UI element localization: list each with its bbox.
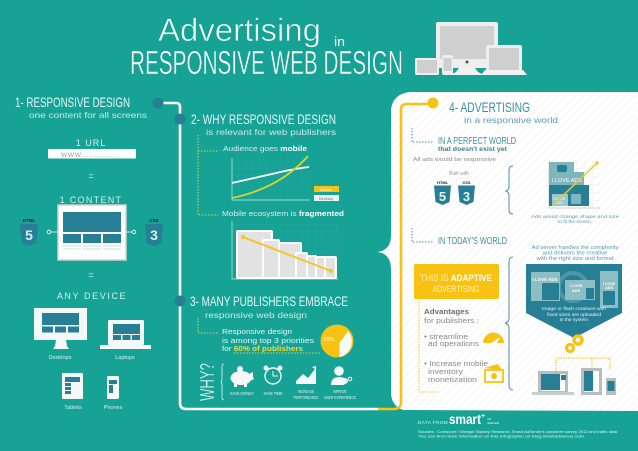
subsection: in a perfect world — [412, 128, 516, 177]
icon: HTML5 badge small — [434, 180, 451, 205]
brace large — [505, 257, 513, 390]
title — [130, 12, 403, 81]
heading 4: 4- ADVERTISING — [449, 99, 530, 115]
heading 3 — [190, 293, 348, 320]
1 URL box: WWW............... — [61, 152, 121, 159]
footer: sources: DATA FROM — [418, 420, 448, 425]
icon: HTML5 badge: HTML — [23, 218, 35, 223]
responsive ad illustration: Ads would change shape and size — [531, 214, 619, 220]
icon: improve user experience — [324, 366, 356, 400]
icon: HTML5 badge small: HTML — [437, 180, 449, 185]
heading 2: 2- WHY RESPONSIVE DESIGN — [191, 111, 336, 127]
icon: HTML5 badge — [20, 218, 38, 246]
1 URL box — [48, 138, 136, 181]
heading 2: is relevant for web publishers — [206, 127, 336, 137]
icon: phone ad layout — [606, 378, 616, 395]
heading 4 — [449, 99, 558, 125]
icon: CSS3 badge small — [458, 180, 475, 205]
subsection: in a perfect world: Built with — [449, 171, 469, 177]
ad server pentagon — [526, 264, 622, 338]
delivery arrows — [556, 358, 610, 371]
responsive ad illustration: I LOVE — [553, 197, 566, 201]
icon: devices illustration — [415, 22, 527, 75]
icon: gauge — [483, 332, 504, 343]
icon: CSS3 badge: CSS — [149, 218, 159, 223]
icon: desktop: Desktops — [49, 355, 72, 361]
icon: CSS3 badge: 3 — [150, 227, 158, 243]
title: RESPONSIVE WEB DESIGN — [130, 44, 403, 81]
icon: phone — [104, 376, 123, 411]
heading 4: in a responsive world — [464, 115, 558, 125]
any device label — [57, 270, 127, 301]
title: Advertising — [158, 12, 321, 48]
1 content layout: 1 CONTENT — [60, 195, 122, 205]
icon: save money: SAVE MONEY — [230, 391, 254, 396]
icon: increase performance: PERFORMANCE — [294, 395, 319, 400]
footer: sources: smart — [449, 411, 481, 427]
icon: save money — [230, 366, 254, 396]
icon: CSS3 badge — [145, 218, 163, 246]
callout: adaptive advertising: THIS IS ADAPTIVE — [420, 273, 492, 283]
footer: sources: SERVER — [487, 421, 500, 425]
subsection: in today's world — [412, 228, 507, 247]
icon: tablet: Tablets — [64, 405, 82, 411]
1 URL box: = — [88, 171, 94, 181]
footer: sources — [418, 411, 618, 438]
icon: HTML5 badge small: 5 — [439, 189, 446, 204]
callout: adaptive advertising — [414, 264, 499, 299]
advantages list: ad operations — [428, 339, 479, 348]
advantages list: • Increase mobile — [424, 359, 488, 368]
icon: tablet ad layout — [581, 368, 602, 395]
heading 1: 1- RESPONSIVE DESIGN — [15, 94, 130, 110]
icon: increase performance: INCREASE — [298, 389, 314, 394]
ad server pentagon: I LOVE ADS — [532, 277, 558, 282]
text: priorities — [222, 327, 320, 353]
ad server description — [532, 245, 619, 262]
device chart: mobile ecosystem is fragmented: Mobile ecosystem is fragmented — [222, 209, 344, 218]
advantages list: for publishers : — [424, 316, 479, 325]
1 URL box: 1 URL — [76, 138, 106, 148]
icon: money — [484, 364, 503, 382]
heading 1 — [15, 94, 147, 120]
text: priorities: Responsive design — [222, 327, 292, 336]
heading 3: responsive web design — [205, 310, 307, 320]
footer: sources: Sources : Comscore / Morgan Stanley Research, Smart AdServer's customer survey 2013 and traffic data — [418, 429, 618, 434]
icon: laptop — [100, 320, 151, 361]
footer: sources: You can find more information on this infographic on blog.smartadserver.com — [418, 434, 585, 438]
ad server pentagon: in the system — [560, 317, 588, 323]
responsive ad illustration — [531, 161, 619, 225]
advantages list: inventory — [428, 367, 463, 376]
icon: HTML5 badge: 5 — [25, 227, 33, 243]
ad server pentagon: ADS — [572, 288, 581, 293]
pie chart: 60% — [320, 324, 354, 358]
line chart: audience goes mobile: Audience goes mobile — [223, 144, 307, 153]
callout: adaptive advertising: ADVERTISING — [432, 284, 480, 294]
icon: desktop — [34, 308, 87, 361]
section 1: responsive design — [15, 94, 163, 411]
subsection: in a perfect world: that doesn't exist yet — [438, 147, 507, 153]
section 3: many publishers embrace — [190, 293, 356, 401]
device chart: mobile ecosystem is fragmented — [222, 209, 344, 279]
advantages list — [419, 299, 488, 392]
responsive ad illustration: to fit the screen. — [558, 219, 592, 225]
heading 2 — [191, 111, 336, 137]
ad server pentagon: ADS — [605, 286, 613, 290]
panel: advertising white background with brace — [377, 92, 638, 411]
responsive ad illustration: I LOVE ADS — [552, 178, 582, 184]
heading 3: 3- MANY PUBLISHERS EMBRACE — [190, 293, 348, 309]
pie chart: 60%: 60% — [323, 337, 335, 343]
line chart: audience goes mobile — [223, 144, 339, 201]
any device label: ANY DEVICE — [57, 291, 127, 301]
icon: gears — [566, 336, 582, 352]
line chart: audience goes mobile: Desktop — [319, 196, 334, 201]
timeline connector — [152, 98, 438, 409]
why label — [197, 363, 224, 401]
brace — [506, 166, 513, 214]
ad server pentagon: I LOVE — [603, 282, 616, 286]
ad server description: Ad server handles the complexity — [532, 245, 619, 251]
heading 1: one content for all screens — [29, 110, 147, 120]
icon: improve user experience: USER EXPERIENCE — [324, 395, 356, 400]
ad server pentagon: I LOVE — [569, 283, 583, 288]
icon: tablet — [62, 373, 83, 411]
section 4: advertising — [412, 99, 622, 395]
advantages list: monetization — [428, 375, 477, 384]
text: priorities: for 60% of publishers — [222, 344, 303, 353]
icon: CSS3 badge small: 3 — [463, 189, 470, 204]
icon: save time — [264, 366, 283, 396]
line chart: audience goes mobile: Mobile — [320, 187, 333, 192]
section 2: why responsive design — [191, 111, 344, 279]
subsection: in a perfect world: All ads would be responsive — [413, 157, 496, 163]
why label: WHY? — [197, 363, 219, 401]
text: priorities: is among top 3 priorities — [222, 336, 314, 345]
responsive ad illustration: ADS — [555, 201, 563, 205]
icon: CSS3 badge small: CSS — [462, 180, 471, 185]
footer: sources: AD — [487, 417, 492, 421]
ad server description: and delivers the creative — [542, 250, 608, 256]
icon: phone: Phones — [104, 405, 123, 411]
icon: improve user experience: IMPROVE — [334, 389, 347, 394]
advantages list: • streamline — [424, 332, 468, 341]
1 content layout — [47, 195, 136, 260]
icon: laptop ad layout — [532, 371, 574, 395]
subsection: in a perfect world: IN A PERFECT WORLD — [438, 135, 516, 147]
ad server pentagon: fixed sizes are uploaded — [547, 312, 601, 318]
icon: laptop: Laptops — [115, 355, 135, 361]
footer: sources: + — [481, 413, 485, 420]
title: in — [334, 34, 345, 49]
any device label: = — [88, 270, 94, 280]
ad server pentagon: Image or flash creatives with — [542, 306, 606, 312]
icon: save time: SAVE TIME — [264, 391, 283, 396]
advantages list: Advantages — [424, 307, 469, 316]
icon: increase performance — [294, 366, 319, 400]
ad server description: with the right size and format — [536, 256, 614, 262]
subsection: in today's world: IN TODAY'S WORLD — [438, 235, 507, 247]
